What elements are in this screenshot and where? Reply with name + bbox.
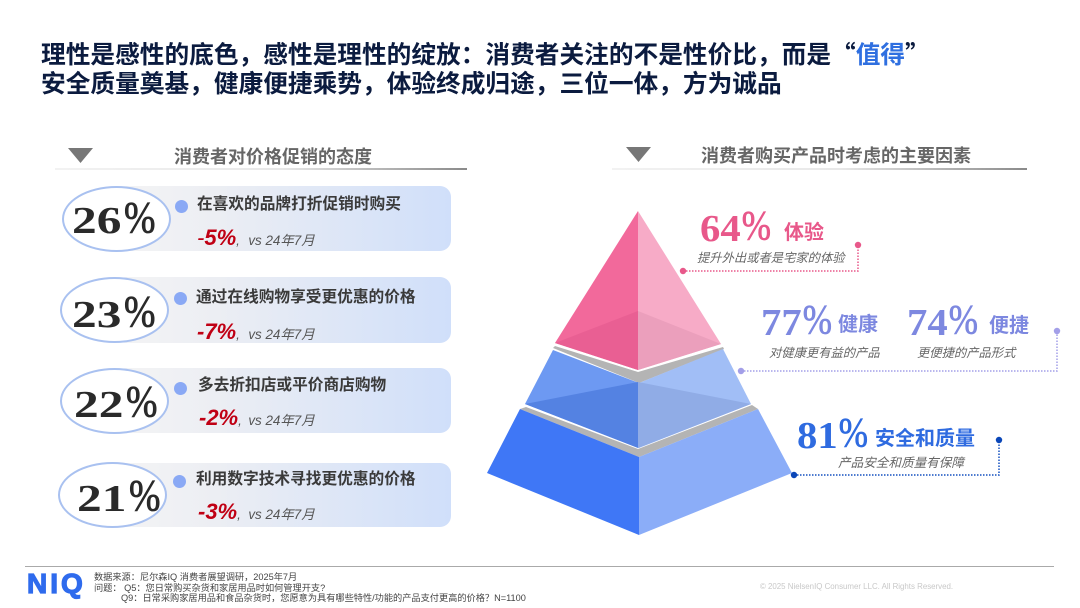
callout: experience 64%: 体验: [784, 222, 824, 244]
callout: health 77%: 77: [761, 302, 802, 344]
callout: health 77%: [761, 296, 880, 360]
source note: [94, 572, 526, 603]
tier: middle blue: [525, 349, 751, 448]
row: 23%: 23: [72, 294, 121, 336]
connector: safety and quality: [791, 437, 1002, 478]
callout: experience 64%: 提升外出或者是宅家的体验: [697, 251, 845, 265]
connector: health and convenience: [738, 328, 1060, 374]
callout: experience 64%: 64: [700, 208, 741, 250]
title: 理性是感性的底色，感性是理性的绽放：消费者关注的不是性价比，而是“值得”: [41, 35, 930, 71]
callout: convenience 74%: 更便捷的产品形式: [917, 346, 1015, 360]
heading: left panel: 消费者对价格促销的态度: [174, 147, 372, 167]
tier: top pink: [555, 211, 721, 370]
title: [41, 35, 930, 98]
row: 21%: [58, 462, 451, 528]
row: 21%: 利用数字技术寻找更优惠的价格: [196, 471, 416, 488]
row: 23%: -7%, vs 24年7月: [197, 319, 315, 344]
source note: Q9：日常采购家居用品和食品杂货时，您愿意为具有哪些特性/功能的产品支付更高的价格？N=1100: [121, 593, 526, 603]
row: 26%: %: [124, 193, 155, 242]
title: 安全质量奠基，健康便捷乘势，体验终成归途，三位一体，方为诚品: [41, 71, 782, 98]
logo: NIQ: NIQ: [27, 568, 86, 599]
source note: 数据来源：尼尔森IQ 消费者展望调研，2025年7月: [94, 572, 297, 582]
heading: right panel: 消费者购买产品时考虑的主要因素: [701, 146, 971, 166]
source note: 问题： Q5：您日常购买杂货和家居用品时如何管理开支?: [94, 583, 325, 593]
callout: convenience 74%: 便捷: [989, 315, 1029, 337]
callout: health 77%: 健康: [838, 314, 878, 336]
row: 21%: 21: [77, 478, 126, 520]
band: upper gray: [553, 346, 724, 383]
row: 22%: -2%, vs 24年7月: [199, 405, 315, 430]
row: 21%: -3%, vs 24年7月: [198, 499, 315, 524]
copyright: © 2025 NielsenIQ Consumer LLC. All Rights Reserved.: [760, 582, 953, 591]
row: 22%: %: [126, 377, 157, 426]
callout: convenience 74%: 74: [907, 302, 948, 344]
callout: safety and quality 81%: 安全和质量: [875, 428, 975, 450]
row: 23%: [60, 277, 451, 344]
callout: convenience 74%: [907, 296, 1029, 360]
panel: price promotion attitudes: [55, 147, 467, 528]
connector: experience: [680, 242, 861, 274]
tier: bottom blue: [487, 409, 792, 535]
row: 26%: [62, 186, 451, 252]
callout: safety and quality 81%: %: [839, 409, 868, 455]
callout: health 77%: 对健康更有益的产品: [769, 346, 880, 360]
callout: experience 64%: [697, 202, 846, 265]
footer rule: [25, 566, 1054, 567]
callout: convenience 74%: %: [949, 296, 978, 342]
callout: safety and quality 81%: 产品安全和质量有保障: [838, 456, 964, 470]
callout: safety and quality 81%: 81: [797, 415, 838, 457]
row: 22%: 多去折扣店或平价商店购物: [198, 377, 386, 394]
row: 23%: 通过在线购物享受更优惠的价格: [196, 289, 416, 306]
band: lower gray: [520, 405, 758, 457]
row: 21%: %: [129, 471, 160, 520]
heading: left panel: [55, 147, 467, 170]
row: 26%: 26: [72, 200, 121, 242]
heading: right panel: [612, 146, 1027, 170]
row: 26%: 在喜欢的品牌打折促销时购买: [197, 196, 401, 213]
row: 23%: %: [124, 287, 155, 336]
callout: health 77%: %: [803, 296, 832, 342]
callout: safety and quality 81%: [797, 409, 975, 470]
row: 22%: 22: [74, 384, 123, 426]
row: 26%: -5%, vs 24年7月: [197, 225, 315, 250]
callout: experience 64%: %: [742, 202, 771, 248]
row: 22%: [60, 368, 451, 434]
